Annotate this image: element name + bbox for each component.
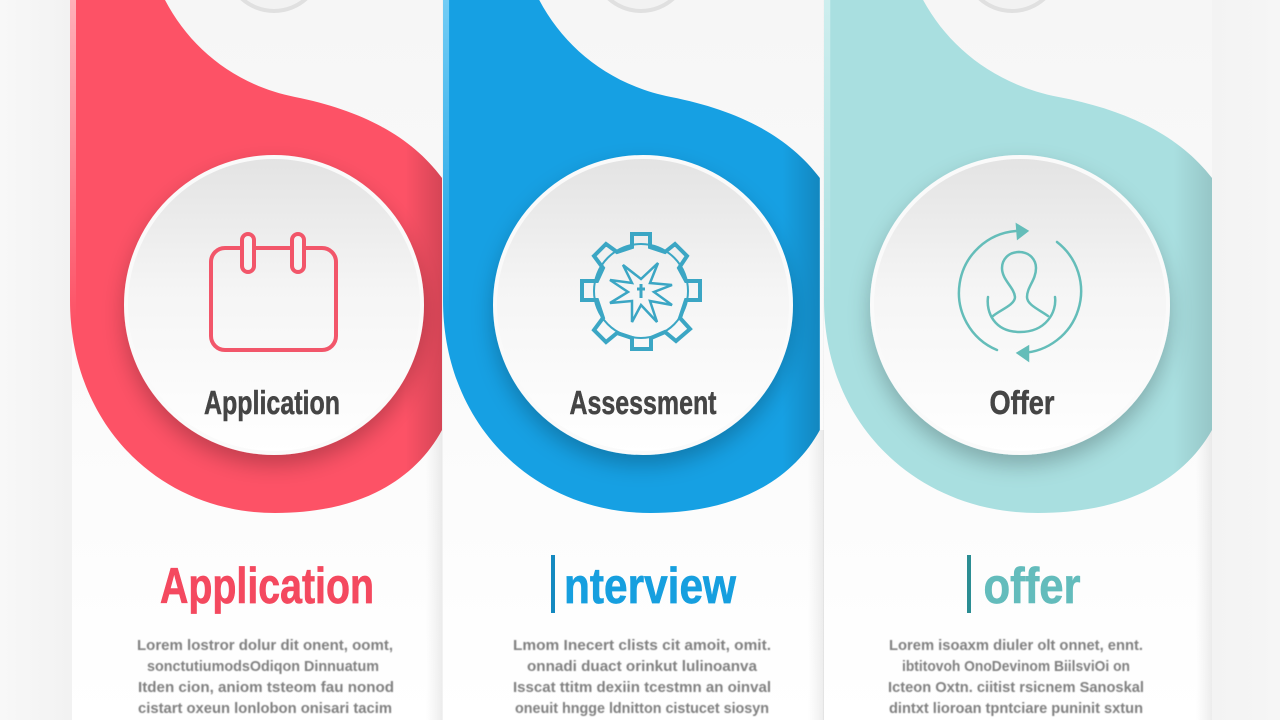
body text: oneuit hngge ldnitton cistucet siosyn: [515, 700, 769, 717]
icon: calendar: [211, 234, 336, 350]
body text: Lorem lostror dolur dit onent, oomt,: [137, 637, 393, 654]
body text: Isscat ttitm dexiin tcestmn an oinval: [513, 679, 771, 696]
body text: [513, 637, 771, 717]
body text: [137, 637, 394, 717]
body text: Lmom Inecert clists cit amoit, omit.: [513, 637, 771, 654]
icon: person with arrows: [959, 225, 1081, 360]
body text: Lorem isoaxm diuler olt onnet, ennt.: [889, 637, 1143, 654]
top disc: [964, 0, 1060, 11]
panel: application column: [70, 0, 442, 720]
heading: nterview: [564, 558, 736, 614]
heading: Application: [160, 558, 374, 614]
badge label: Assessment: [570, 384, 716, 421]
circle badge: [872, 157, 1168, 453]
red ribbon: [70, 0, 442, 520]
panel: interview column: [443, 0, 824, 720]
badge label: Offer: [990, 384, 1055, 421]
body text: onnadi duact orinkut lulinoanva: [527, 658, 758, 675]
top disc: [226, 0, 322, 11]
teal ribbon: [824, 0, 1212, 520]
blue ribbon: [443, 0, 820, 520]
body text: sonctutiumodsOdiqon Dinnuatum: [147, 658, 379, 675]
body text: cistart oxeun lonlobon onisari tacim: [138, 700, 392, 717]
body text: dintxt lioroan tpntciare puninit sxtun: [889, 700, 1143, 717]
body text: Itden cion, aniom tsteom fau nonod: [138, 679, 394, 696]
heading: offer: [984, 558, 1080, 614]
top disc: [593, 0, 689, 11]
body text: ibtitovoh OnoDevinom BiilsviOi on: [902, 658, 1130, 675]
body text: [888, 637, 1144, 717]
icon: gear with star: [582, 234, 700, 349]
circle badge: [495, 157, 791, 453]
body text: Icteon Oxtn. ciitist rsicnem Sanoskal: [888, 679, 1144, 696]
badge label: Application: [204, 384, 340, 421]
panel: offer column: [824, 0, 1212, 720]
circle badge: [126, 157, 422, 453]
